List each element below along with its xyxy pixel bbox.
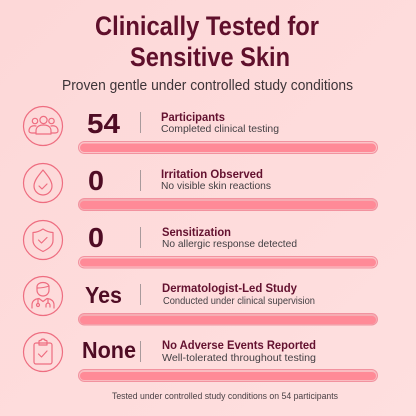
icon: water drop with check [24, 164, 62, 202]
icon: group of people [24, 106, 62, 146]
bar [78, 256, 378, 268]
value: 0 [88, 165, 104, 196]
row: adverse events [24, 332, 378, 382]
description: Completed clinical testing [161, 123, 279, 135]
value: 54 [87, 108, 120, 139]
description: Conducted under clinical supervision [163, 295, 315, 307]
icon: shield with check [24, 220, 62, 260]
label: Sensitization [162, 225, 231, 239]
row: irritation [24, 164, 378, 210]
row: sensitization [24, 220, 378, 268]
title [95, 11, 319, 72]
footer note: Tested under controlled study conditions on 54 participants [112, 391, 338, 402]
title: Sensitive Skin [130, 42, 290, 72]
label: Dermatologist-Led Study [162, 281, 297, 295]
label: Irritation Observed [161, 167, 263, 181]
icon: clipboard with check [24, 332, 62, 372]
description: No allergic response detected [162, 238, 297, 250]
title: Clinically Tested for [95, 11, 319, 41]
label: No Adverse Events Reported [162, 338, 316, 352]
description: Well-tolerated throughout testing [162, 352, 316, 364]
bar [78, 198, 378, 210]
value: Yes [85, 282, 122, 308]
bar [78, 314, 378, 325]
value: None [82, 337, 136, 363]
bar [78, 370, 378, 382]
subtitle: Proven gentle under controlled study conditions [62, 78, 353, 94]
description: No visible skin reactions [161, 180, 271, 192]
icon: doctor with stethoscope [24, 276, 62, 316]
bar [78, 142, 378, 154]
label: Participants [161, 110, 225, 124]
row: participants [24, 106, 378, 154]
row: dermatologist [24, 276, 378, 325]
value: 0 [88, 222, 104, 253]
